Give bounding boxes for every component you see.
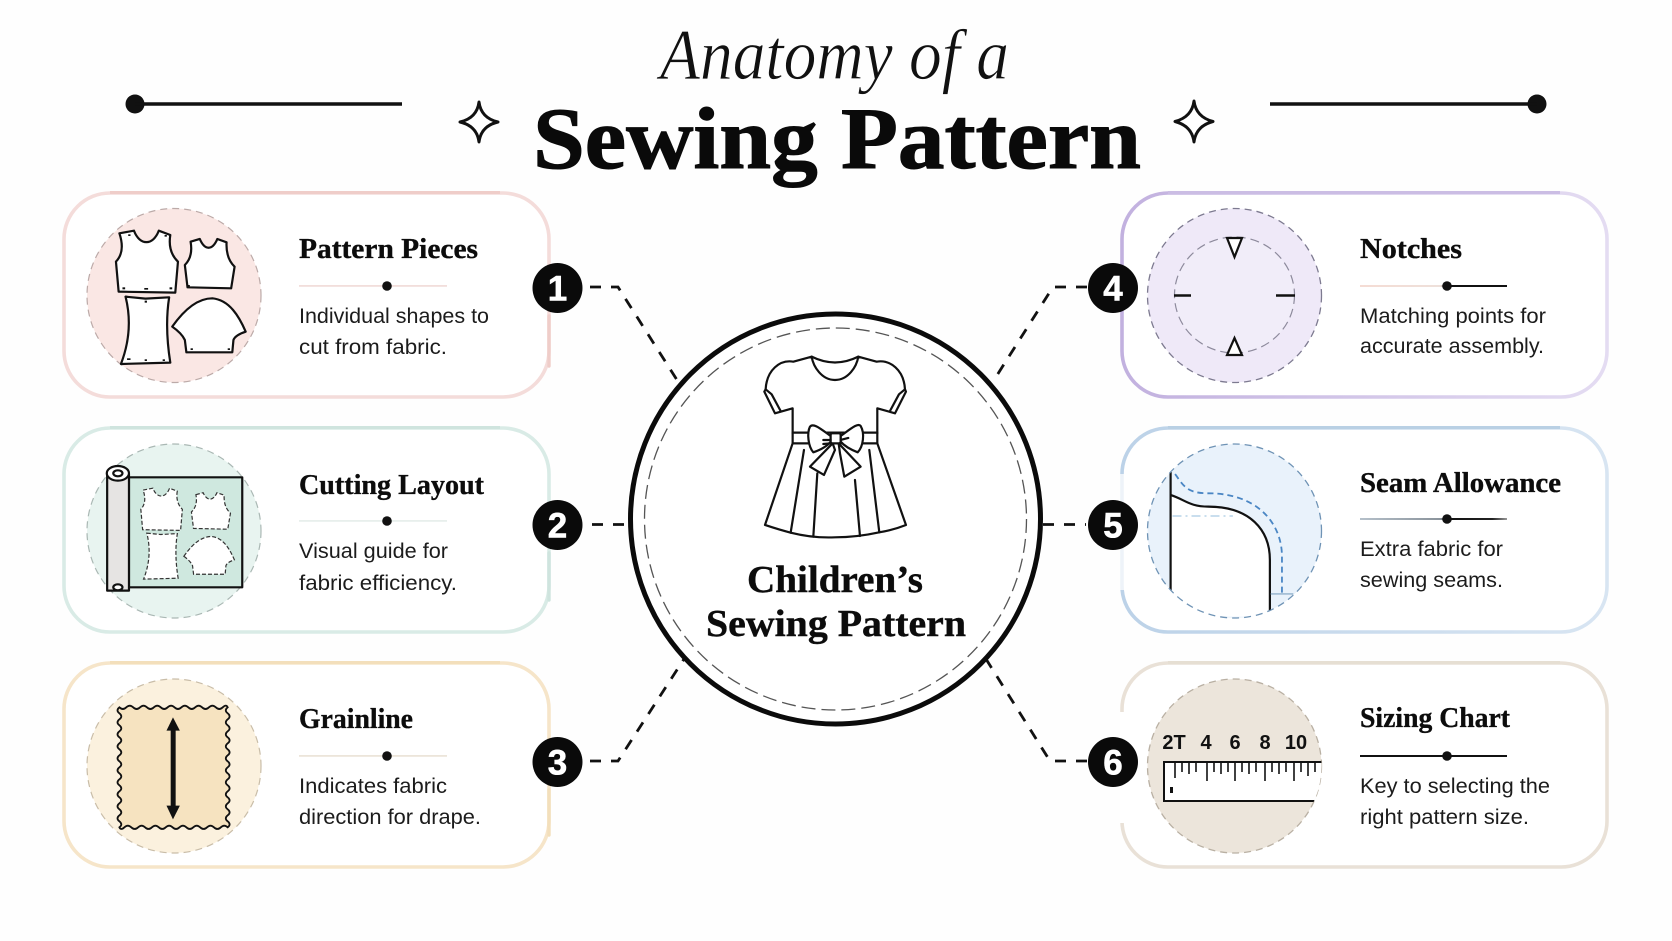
divider (299, 516, 447, 526)
text: Notches description (1360, 304, 1546, 358)
text: Pattern Pieces description: Individual shapes to (299, 304, 489, 328)
text: Cutting Layout description: Visual guide for (299, 539, 448, 563)
heading: Notches: Notches (1360, 234, 1462, 265)
title: Sewing Pattern: Sewing Pattern (533, 91, 1141, 188)
heading: Cutting Layout: Cutting Layout (299, 470, 485, 501)
divider (299, 281, 447, 291)
icon: left sparkle (460, 102, 498, 142)
badge 2 (532, 500, 582, 550)
badge 5 (1088, 500, 1138, 550)
heading: Sizing Chart: Sizing Chart (1360, 703, 1511, 734)
icon: notches (1148, 208, 1322, 382)
text: Notches description: Matching points for (1360, 304, 1546, 328)
ruler size labels: 6 (1229, 732, 1241, 754)
panel: Seam Allowance (1122, 428, 1607, 632)
icon: right sparkle (1175, 101, 1213, 142)
icon: grainline fabric (87, 679, 261, 853)
text: Sizing Chart description (1360, 774, 1550, 829)
icon: sizing ruler (1148, 679, 1334, 853)
badge 3: 3 (548, 744, 567, 782)
text: Grainline description (299, 774, 481, 829)
badge 2: 2 (548, 506, 567, 546)
title: Anatomy of a: Anatomy of a (656, 15, 1009, 95)
ruler size labels: 2T (1162, 732, 1186, 754)
text: Pattern Pieces description (299, 304, 489, 359)
divider (1360, 281, 1507, 291)
text: Sizing Chart description: right pattern size. (1360, 805, 1529, 829)
panel: Cutting Layout (64, 428, 549, 632)
connectors (590, 287, 1087, 761)
icon: pattern pieces (87, 208, 261, 382)
ruler size labels (1162, 732, 1307, 754)
heading: Seam Allowance: Seam Allowance (1360, 468, 1561, 499)
text: Notches description: accurate assembly. (1360, 334, 1544, 358)
text: Seam Allowance description (1360, 537, 1503, 592)
hub label: Sewing Pattern (706, 603, 966, 645)
icon: cutting layout (87, 444, 261, 618)
badge 1 (532, 263, 582, 313)
text: Sizing Chart description: Key to selecting the (1360, 774, 1550, 798)
text: Cutting Layout description (299, 539, 457, 595)
divider (299, 751, 447, 761)
icon: children's dress (764, 357, 906, 537)
panel: Sizing Chart (1122, 662, 1607, 867)
text: Grainline description: direction for drape. (299, 805, 481, 829)
icon: seam allowance (1148, 444, 1322, 618)
panel: Pattern Pieces (64, 192, 549, 397)
hub label: Children’s (747, 559, 923, 601)
text: Grainline description: Indicates fabric (299, 774, 447, 798)
heading: Pattern Pieces: Pattern Pieces (299, 234, 478, 265)
ruler size labels: 10 (1285, 732, 1307, 754)
divider (1360, 751, 1507, 761)
badge 3 (532, 737, 582, 787)
decorative rule: left (126, 94, 402, 114)
badge 6: 6 (1103, 744, 1123, 782)
badge 4 (1088, 263, 1138, 313)
divider (1360, 514, 1507, 524)
text: Seam Allowance description: sewing seams. (1360, 568, 1503, 592)
hub label (706, 559, 966, 645)
badge 4: 4 (1103, 270, 1123, 308)
decorative rule: right (1270, 94, 1546, 114)
central hub (630, 314, 1040, 724)
ruler size labels: 8 (1259, 732, 1271, 754)
badge 6 (1088, 737, 1138, 787)
badge 1: 1 (548, 270, 567, 308)
ruler size labels: 4 (1200, 732, 1212, 754)
text: Seam Allowance description: Extra fabric for (1360, 537, 1503, 561)
text: Cutting Layout description: fabric efficiency. (299, 571, 457, 595)
panel: Grainline (64, 662, 549, 867)
panel: Notches (1122, 192, 1607, 397)
badge 5: 5 (1103, 506, 1123, 546)
heading: Grainline: Grainline (299, 704, 413, 735)
text: Pattern Pieces description: cut from fabric. (299, 335, 447, 359)
